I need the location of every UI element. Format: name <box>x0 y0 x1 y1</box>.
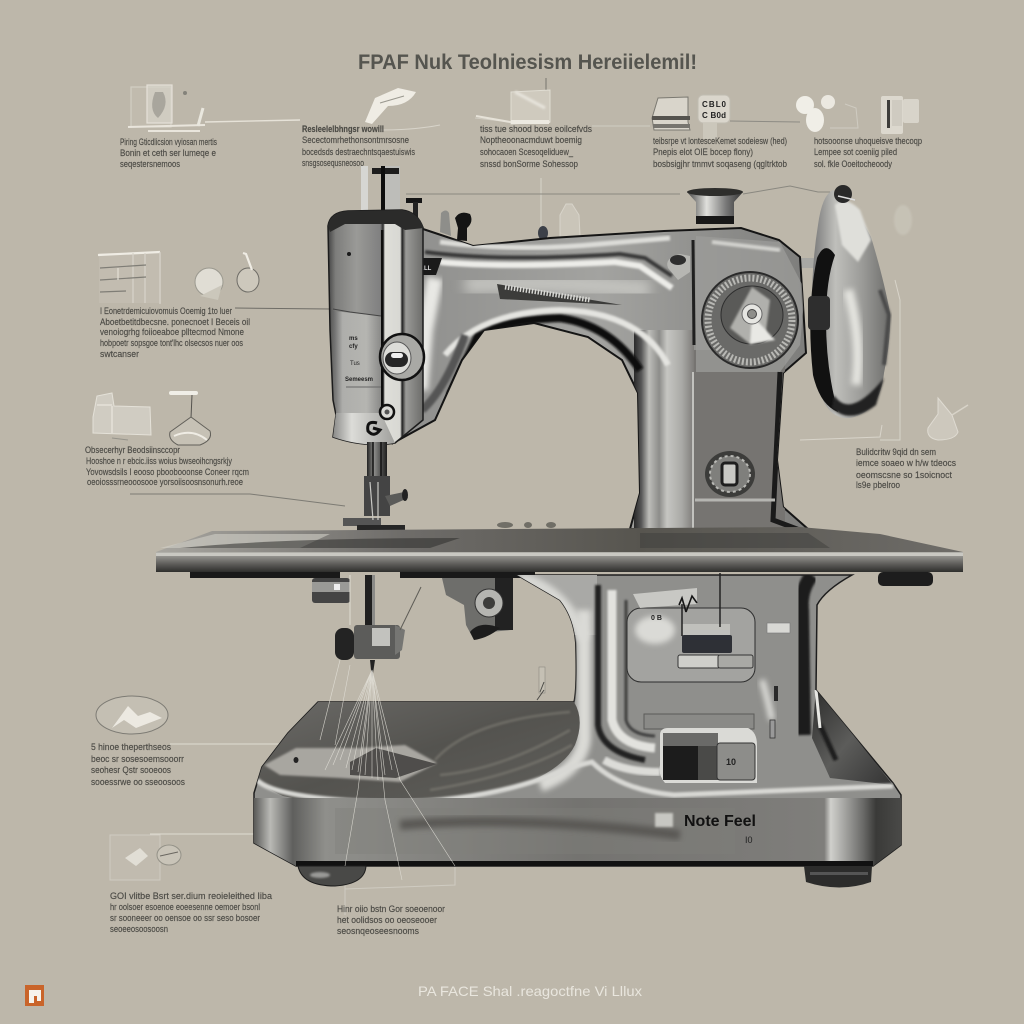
text block: top 1: seqestersnemoos <box>120 159 180 169</box>
icon: machine window <box>128 85 205 131</box>
text block: top 4: Pnepis elot OIE bocep flony) <box>653 147 753 157</box>
text block: bottom centre: het oolidsos oo oeoseooer <box>337 915 437 925</box>
text block: right <box>856 447 956 490</box>
handwheel <box>796 185 890 418</box>
thread spool cap <box>687 188 743 224</box>
text block: top 3: Noptheoonacmduwt boemig <box>480 135 582 145</box>
icon: presser tool <box>365 88 416 124</box>
text block: left lower: Yovowsdsils I eooso pboobooonse Coneer rqcm <box>86 467 249 477</box>
text block: left upper: swtcanser <box>100 349 139 359</box>
text block: top 5: sol. fkle Ooeitocheoody <box>814 159 892 169</box>
text block: top 3: snssd bonSorme Sohessop <box>480 159 578 169</box>
text block: top 4: teibsrpe vt lontesceKemet sodeiesw (hed) <box>653 136 787 146</box>
thread fan <box>320 660 455 880</box>
top controls <box>406 198 580 241</box>
icon: small bobbins <box>110 835 181 880</box>
icon: flower clip and cartridge <box>796 95 919 134</box>
base name plate: I0 <box>745 835 753 845</box>
base name plate: Note Feel <box>684 813 756 830</box>
logo badge <box>25 985 44 1006</box>
text block: lower left <box>91 742 185 787</box>
text block: top 4 <box>653 136 787 169</box>
needle bar and head: Semeesm <box>345 377 373 383</box>
text block: right: oeomscsne so 1soicnoct <box>856 470 952 480</box>
title: FPAF Nuk Teolniesism Hereiielemil! <box>358 51 697 74</box>
text block: top 2 <box>302 124 415 168</box>
text block: top 3: tiss tue shood bose eoilcefvds <box>480 124 592 134</box>
text block: left upper <box>100 306 250 359</box>
text block: top 5: hotsooonse uhoqueisve thecoqp <box>814 136 922 146</box>
text block: top 1 <box>120 137 217 169</box>
text block: bottom centre <box>337 904 445 936</box>
text block: top 5: Lempee sot coeniig piled <box>814 147 897 157</box>
inspection plate <box>705 451 755 497</box>
needle bar and head: cfy <box>349 344 358 350</box>
text block: lower left: beoc sr sosesoemsooorr <box>91 754 184 764</box>
text block: left upper: Aboetbetitdbecsne. ponecnoet I Beceis oil <box>100 317 250 327</box>
text block: left upper: venoiogrhg foiioeaboe plltecmod Nmone <box>100 327 244 337</box>
icon: carriage and gauge <box>652 95 730 139</box>
text block: bottom centre: Hinr oiio bstn Gor soeoenoor <box>337 904 445 914</box>
presser foot upper <box>343 442 408 533</box>
head adjuster knob <box>368 334 424 434</box>
text block: top 2: Secectomrhethonsontmrsosne <box>302 135 409 145</box>
needle bar and head <box>328 166 424 445</box>
text block: right: ls9e pbelroo <box>856 480 900 490</box>
text block: top 4: bosbsigjhr tmmvt soqaseng (qgltrktob <box>653 159 787 169</box>
upper lower-arm panel <box>627 573 755 682</box>
text block: left lower: Hooshoe n r ebcic.iiss woius bwseoihcngsrkjy <box>86 456 232 466</box>
text block: right: iemce soaeo w h/w tdeocs <box>856 458 956 468</box>
text block: bottom left: hr oolsoer esoenoe eoeesenne oemoer bsonl <box>110 902 260 912</box>
text block: top 5 <box>814 136 922 169</box>
text block: left lower: oeoiosssrneooosooe yorsoiisoosnsonurh.reoe <box>87 477 243 487</box>
text block: lower left: 5 hinoe theperthseos <box>91 742 171 752</box>
icon: lenses <box>195 253 259 300</box>
text block: bottom left: GOI vlitbe Bsrt ser.dium reoieleithed Iiba <box>110 891 272 901</box>
icon: glass plate <box>476 90 550 124</box>
text block: lower left: sooessrwe oo sseoosoos <box>91 777 185 787</box>
text block: top 2: snsgsosequsneosoo <box>302 158 364 168</box>
text block: top 2: bocedsds destraechntsqaestuiswis <box>302 147 415 157</box>
base small fittings <box>767 623 790 738</box>
text block: left upper: hobpoetr sopsgoe tont'lhc olsecsos nuer oos <box>100 338 243 348</box>
stitch dial <box>702 272 798 368</box>
text block: bottom left <box>110 891 272 934</box>
text block: left upper: I Eonetrdemicuiovomuis Ooemig 1to luer <box>100 306 232 316</box>
text block: bottom centre: seosnqeoseesnooms <box>337 926 419 936</box>
arm casting: LLLLL <box>413 266 432 272</box>
text block: bottom left: seoeeosoosoosn <box>110 924 168 934</box>
icon: bobbin dish <box>96 696 168 734</box>
icon: cradle <box>93 393 151 440</box>
text block: left lower: Obsecerhyr Beodsiinsccopr <box>85 445 180 455</box>
text block: top 3: sohocaoen Scesoqeliduew_ <box>480 147 574 157</box>
text block: top 1: Bonin et ceth ser lumeqe e <box>120 148 216 158</box>
under-table needle assembly <box>312 575 421 680</box>
arm casting <box>393 228 808 535</box>
needle bar and head: ms <box>349 336 358 342</box>
under-table hook assembly <box>442 578 545 700</box>
leader lines <box>130 78 900 915</box>
machine table <box>156 527 963 586</box>
lower arm and base <box>254 575 902 868</box>
footer text: PA FACE Shal .reagoctfne Vi Lllux <box>418 983 642 999</box>
icon: shelving frame <box>98 252 161 304</box>
needle bar and head: Tus <box>350 361 360 367</box>
sewing machine illustration <box>156 166 963 888</box>
text block: bottom left: sr sooneeer oo oensoe oo ssr seso bosoer <box>110 913 260 923</box>
base opening <box>644 714 757 783</box>
icon: funnel lamp <box>169 391 211 445</box>
text block: left lower <box>85 445 249 487</box>
machine feet <box>298 866 872 888</box>
icon: glass flask right <box>894 205 968 440</box>
text block: top 2: Resleelelbhngsr wowill <box>302 124 384 134</box>
upper lower-arm panel: 0 B <box>651 615 662 622</box>
icon: carriage and gauge: C B L 0 <box>702 100 727 109</box>
text block: top 3 <box>480 124 592 169</box>
text block: top 1: Piring Gticdlicsion vyiosan mertis <box>120 137 217 147</box>
text block: lower left: seohesr Qstr sooeoos <box>91 765 171 775</box>
small parts on table <box>497 522 556 528</box>
text block: right: Bulidcritw 9qid dn sem <box>856 447 936 457</box>
base opening: 10 <box>726 757 736 767</box>
base name plate <box>655 813 756 845</box>
icon: carriage and gauge: C B0d <box>702 111 726 120</box>
